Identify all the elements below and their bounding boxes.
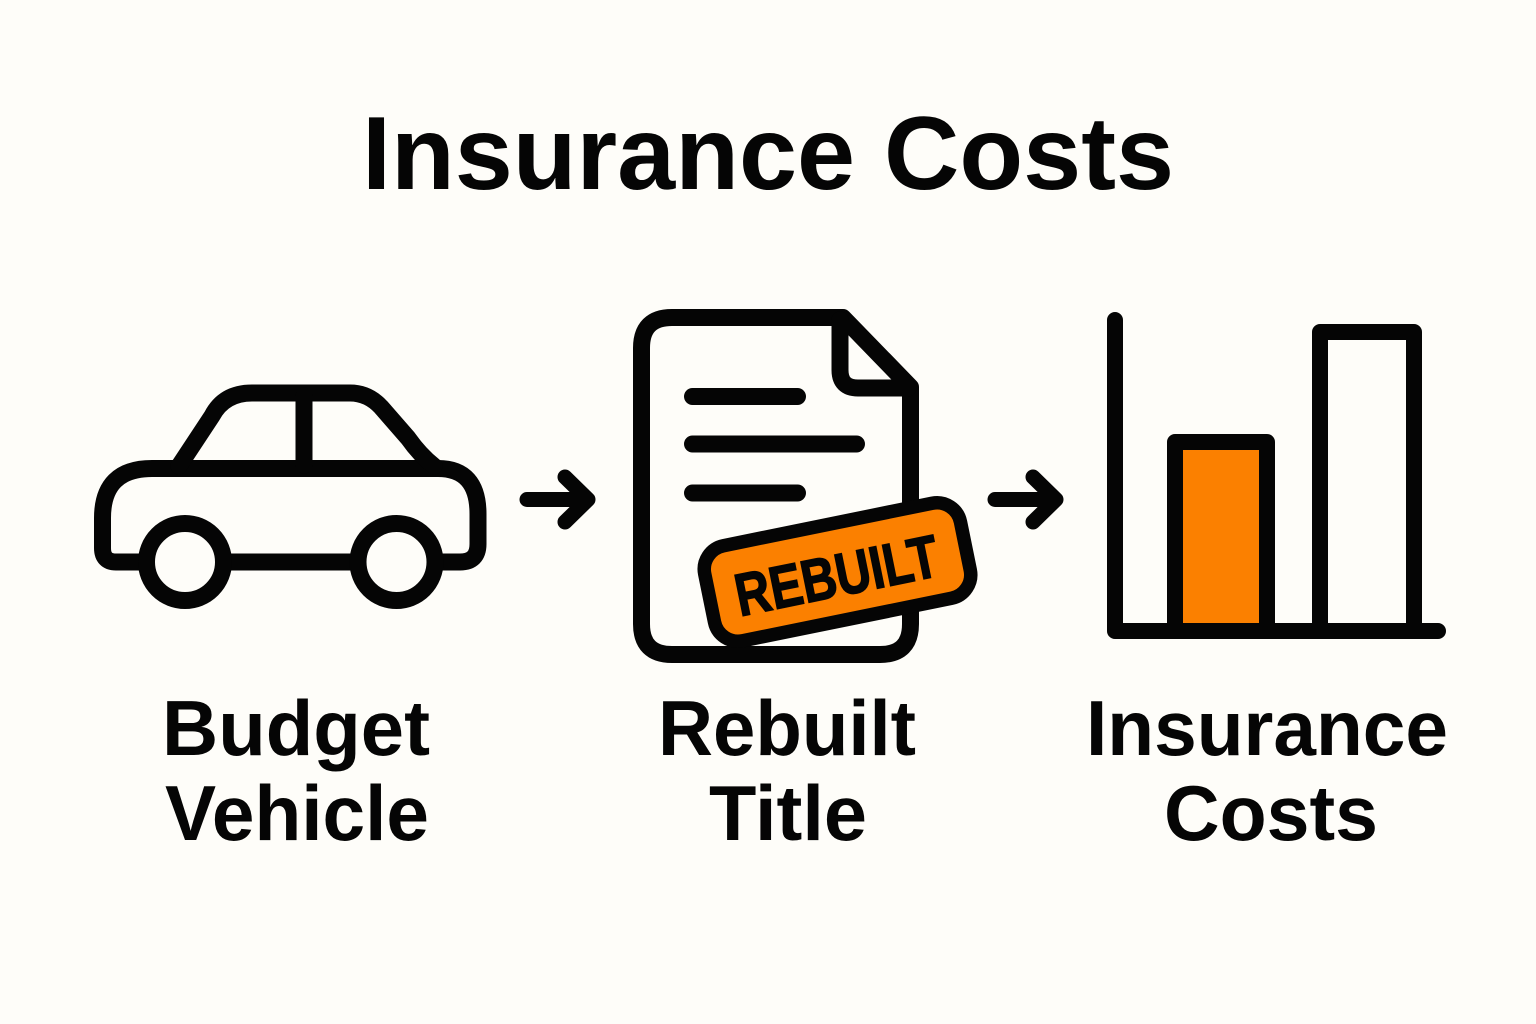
stamp text: REBUILT — [729, 522, 944, 629]
icon: document with rebuilt stamp — [642, 318, 975, 654]
stamp — [700, 498, 975, 646]
label: insurance costs: Insurance — [1086, 684, 1448, 772]
label: rebuilt title: Rebuilt — [658, 684, 916, 772]
bar: tall — [1320, 332, 1414, 631]
bar: rebuilt — [1175, 442, 1267, 631]
label: budget vehicle: Budget — [162, 684, 430, 772]
document outline — [642, 318, 910, 654]
label: insurance costs — [1086, 684, 1448, 857]
title: Insurance Costs — [362, 96, 1174, 212]
label: rebuilt title — [658, 684, 916, 857]
label: budget vehicle — [162, 684, 430, 857]
axes — [1115, 320, 1438, 631]
label: insurance costs: Costs — [1164, 769, 1378, 857]
icon: bar chart — [1115, 320, 1438, 631]
label: budget vehicle: Vehicle — [165, 769, 429, 857]
arrow: car to document — [527, 477, 588, 522]
label: rebuilt title: Title — [709, 769, 867, 857]
arrow: document to chart — [995, 477, 1056, 522]
icon: car — [102, 393, 478, 600]
